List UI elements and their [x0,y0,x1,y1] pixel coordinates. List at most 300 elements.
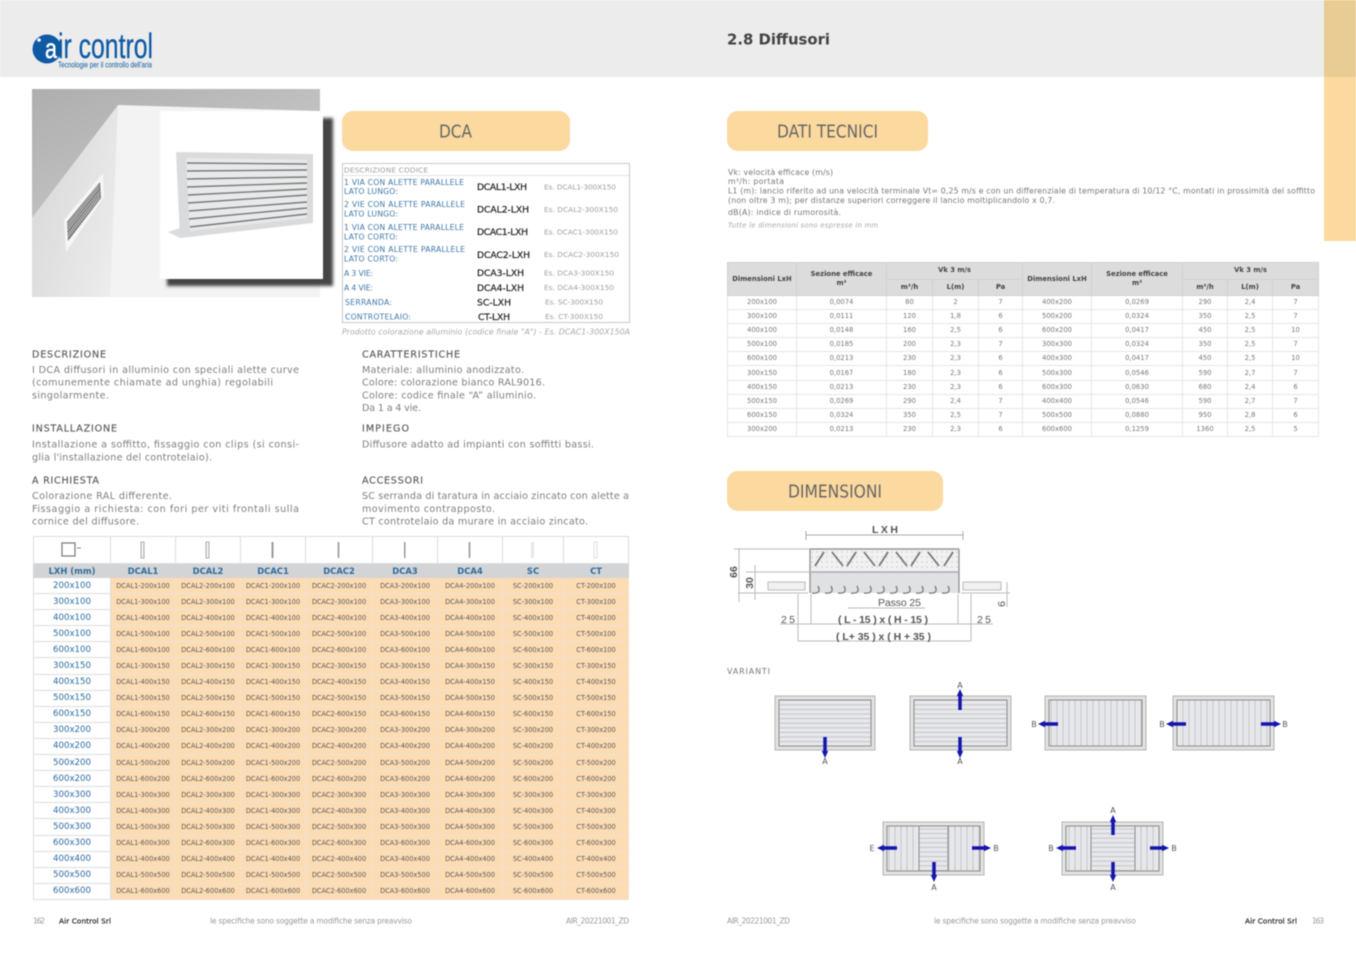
ordering codes table: DCAL1-300x150 [116,662,170,670]
ordering codes table: DCAC2-600x100 [312,646,366,654]
variant 3: one way left: B [1031,720,1037,729]
variant 5: three ways: B [993,844,999,853]
text block: a richiesta: Fissaggio a richiesta: con fori per viti frontali sulla [32,504,299,515]
ordering codes table: 600x100 [53,645,91,655]
technical data table: 80 [905,298,914,306]
ordering codes table: DCAL2-300x300 [181,791,235,799]
technical data table: 500x500 [1042,411,1072,419]
ordering codes table: 300x300 [53,790,91,800]
ordering codes table: DCAC1-600x600 [246,887,300,895]
variant 1: one way down [775,696,875,766]
code description table: DESCRIZIONE CODICE [344,166,428,174]
ordering codes table [32,536,630,900]
technical data table: 7 [998,340,1003,348]
ordering codes table: CT-600x100 [576,646,616,654]
dimension drawing [728,524,1010,643]
product photo [32,89,333,297]
technical data table: 0,0074 [830,298,853,306]
code description table: Es. DCAL1-300X150 [544,182,616,192]
dimension drawing: 25 [977,614,991,626]
code description table: Es. DCAL2-300X150 [544,205,618,214]
ordering codes table: DCAL1-400x300 [116,807,170,815]
technical data table: 300x200 [747,425,777,433]
ordering codes table: SC-300x100 [513,598,553,606]
ordering codes table: CT-500x500 [576,871,616,879]
technical data table: 2,5 [1245,326,1255,334]
technical notes: m³/h: portata [728,177,784,186]
technical data table: 680 [1199,383,1212,391]
ordering codes table: DCA3-300x150 [380,662,430,670]
dimension drawing: 30 [744,577,756,589]
ordering codes table: 300x100 [53,597,91,607]
variant 5: three ways: E [869,844,875,853]
variant 6: four ways: A [1110,806,1116,815]
ordering codes table: DCAL1-600x300 [116,839,170,847]
ordering codes table: DCAC1-400x400 [246,855,300,863]
technical data table: L(m) [947,283,964,291]
pill heading: DCA: DCA [439,122,473,142]
ordering codes table: CT-500x300 [576,823,616,831]
technical data table: m³/h [1196,283,1214,291]
technical data table: 0,0213 [830,383,853,391]
technical data table: 0,1259 [1125,425,1149,433]
ordering codes table: SC [527,566,539,576]
technical data table: 2,5 [950,411,961,419]
ordering codes table: DCAL1-400x150 [116,678,170,686]
footer right: Air Control Srl [1245,916,1297,926]
ordering codes table: DCAL1-400x400 [116,855,170,863]
technical data table: 500x200 [1042,312,1072,320]
technical data table: 2,5 [1245,354,1255,362]
ordering codes table: DCA3 [392,566,418,576]
text block: installazione: Installazione a soffitto, fissaggio con clips (si consi- [32,440,299,450]
ordering codes table: SC-400x150 [513,678,553,686]
ordering codes table: DCAL2-500x500 [181,871,235,879]
ordering codes table: LXH (mm) [49,566,95,576]
text block: a richiesta: cornice del diffusore. [32,516,139,528]
ordering codes table: DCA3-400x400 [380,855,430,863]
technical data table: 7 [1293,298,1298,306]
technical data table: 2,5 [1245,340,1255,348]
technical data table: 2,3 [950,425,961,433]
technical data table: 450 [1199,354,1212,362]
ordering codes table: CT-300x300 [576,791,616,799]
variant 4: two ways horizontal: B [1282,720,1288,729]
technical data table: 6 [998,312,1003,320]
technical data table: 590 [1199,369,1212,377]
technical data table: 0,0417 [1125,354,1149,362]
ordering codes table: DCA3-500x100 [380,630,430,638]
technical notes: Vk: velocità efficace (m/s) [728,168,833,177]
technical data table: 0,0111 [830,312,853,320]
ordering codes table: 200x100 [53,581,91,591]
ordering codes table: DCAL2 [193,566,223,576]
technical notes: (non oltre 3 m); per distanze superiori correggere il lancio moltiplicandolo x 0,7. [728,196,1055,205]
pill heading: dati tecnici: DATI TECNICI [777,122,878,142]
ordering codes table: SC-400x400 [513,855,553,863]
technical data table: 7 [998,298,1003,306]
ordering codes table: DCAL1 [128,566,158,576]
technical data table: 2,3 [950,369,961,377]
ordering codes table: DCAC2-400x200 [312,742,366,750]
ordering codes table: SC-400x100 [513,614,553,622]
technical data table: 7 [998,397,1003,405]
code description table: SC-LXH [477,298,511,308]
technical data table: L(m) [1241,283,1259,291]
technical data table: 290 [903,397,916,405]
technical data table: 7 [1293,312,1298,320]
technical data table: Dimensioni LxH [732,274,792,282]
ordering codes table: DCAC2-400x400 [312,855,366,863]
pill heading: dimensioni [727,471,943,511]
dimension drawing: 25 [781,614,795,626]
code description table: Es. DCA4-300X150 [544,283,614,292]
ordering codes table: DCAC2-500x500 [312,871,366,879]
ordering codes table: DCAL2-300x100 [181,598,235,606]
ordering codes table: DCA3-500x200 [380,759,430,767]
variant 6: four ways: B [1048,844,1054,853]
ordering codes table: DCA4-300x100 [445,598,495,606]
footer right [727,916,1324,926]
code description table [342,164,630,323]
technical data table: 2,7 [1245,397,1255,405]
text block: a richiesta: Colorazione RAL differente. [32,491,172,502]
code description table: DCAL2-LXH [477,204,529,216]
technical data table: 400x300 [1042,354,1072,362]
ordering codes table: DCAL1-200x100 [116,582,170,590]
ordering codes table: DCA4-400x300 [445,807,495,815]
technical notes: Tutte le dimensioni sono espresse in mm [728,222,878,230]
ordering codes table: SC-600x150 [513,710,553,718]
text block: descrizione: singolarmente. [32,390,109,402]
ordering codes table: 500x500 [53,870,91,880]
ordering codes table: DCAC1-400x200 [246,742,300,750]
ordering codes table: DCAC1-500x100 [246,630,300,638]
ordering codes table: DCAC1-500x150 [246,694,300,702]
ordering codes table: DCAC2-500x300 [312,823,366,831]
ordering codes table: CT-500x150 [576,694,616,702]
text block: accessori [362,476,629,528]
ordering codes table: DCA3-500x500 [380,871,430,879]
technical notes: L1 (m): lancio riferito ad una velocità terminale Vt= 0,25 m/s e con un differenziale di temperatura di 10/12 °C, montati in prossimità del soffitto [728,186,1315,196]
ordering codes table: SC-500x200 [513,759,553,767]
ordering codes table: SC-600x300 [513,839,553,847]
ordering codes table: DCAC2-400x100 [312,614,366,622]
ordering codes table: DCAC2-300x200 [312,726,366,734]
text block: accessori: movimento contrapposto. [362,504,495,515]
ordering codes table: DCA4-400x100 [445,614,495,622]
code description table: A 3 VIE: [344,269,373,278]
ordering codes table: DCA3-300x100 [380,598,430,606]
technical data table: 1360 [1196,425,1214,433]
variant 1: one way down: A [822,757,828,766]
ordering codes table: SC-500x100 [513,630,553,638]
ordering codes table: CT-400x200 [576,742,616,750]
ordering codes table: CT-500x100 [576,630,616,638]
pill heading: dati tecnici [727,111,928,151]
ordering codes table: DCA4-500x500 [445,871,495,879]
technical data table: 230 [903,425,916,433]
ordering codes table: DCAC2-300x300 [312,791,366,799]
ordering codes table: DCA4-500x100 [445,630,495,638]
ordering codes table: SC-400x200 [513,742,553,750]
ordering codes table: DCA4-400x400 [445,855,495,863]
ordering codes table: DCAC2-500x200 [312,759,366,767]
ordering codes table: DCAL2-600x100 [181,646,235,654]
ordering codes table: DCAL1-600x200 [116,775,170,783]
technical data table: 600x150 [747,411,777,419]
text block: impiego: Diffusore adatto ad impianti con soffitti bassi. [362,440,594,450]
text block: accessori: SC serranda di taratura in acciaio zincato con alette a [362,491,629,502]
footnote: Prodotto colorazione alluminio (codice finale "A") - Es. DCAC1-300X150A [342,328,630,336]
ordering codes table: DCA3-400x100 [380,614,430,622]
footer right: 163 [1312,916,1324,926]
ordering codes table: 600x150 [53,709,91,719]
ordering codes table: DCA4-500x200 [445,759,495,767]
code description table: DCA3-LXH [477,268,524,279]
ordering codes table: DCAC2-500x150 [312,694,366,702]
page heading: 2.8 Diffusori: 2.8 Diffusori [727,30,830,48]
text block: impiego: IMPIEGO [362,424,409,434]
ordering codes table: DCAL1-500x100 [116,630,170,638]
ordering codes table: DCAL1-300x100 [116,598,170,606]
ordering codes table: DCA4-500x300 [445,823,495,831]
code description table: CONTROTELAIO: [345,312,411,322]
ordering codes table: 500x100 [53,629,91,639]
ordering codes table: DCAC2 [323,566,355,576]
technical data table: 2 [953,298,958,306]
technical data table: 6 [998,425,1003,433]
ordering codes table: DCA4-400x200 [445,742,495,750]
technical data table: 2,5 [1245,425,1255,433]
ordering codes table: DCAL2-400x400 [181,855,235,863]
ordering codes table: DCAL2-600x600 [181,887,235,895]
code description table: DCAC2-LXH [477,250,530,261]
ordering codes table: DCAL1-400x100 [116,614,170,622]
technical data table: m² [836,279,847,287]
dimension drawing: Passo 25 [878,597,921,609]
ordering codes table: CT-400x100 [576,614,616,622]
technical data table: 590 [1199,397,1212,405]
technical data table: 300x100 [747,312,777,320]
text block: accessori: CT controtelaio da murare in acciaio zincato. [362,516,588,528]
text block: caratteristiche: Colore: colorazione bianco RAL9016. [362,378,545,388]
technical data table: 600x100 [747,354,777,362]
dimension drawing: L X H [872,524,898,536]
footer left [33,916,629,926]
technical data table: 500x100 [747,340,777,348]
technical data table: 2,5 [950,326,961,334]
text block: caratteristiche: Materiale: alluminio anodizzato. [362,365,524,376]
footer right: le specifiche sono soggette a modifiche senza preavviso [934,916,1136,926]
ordering codes table: DCAC2-300x150 [312,662,366,670]
ordering codes table: DCAL2-300x200 [181,726,235,734]
ordering codes table: SC-200x100 [513,582,553,590]
ordering codes table: SC-600x200 [513,775,553,783]
technical data table: 0,0269 [830,397,853,405]
variant 2: two ways vertical [910,681,1011,766]
technical data table: 600x200 [1042,326,1072,334]
ordering codes table: DCA4-600x150 [445,710,495,718]
text block: installazione: glia l'installazione del controtelaio). [32,452,212,464]
ordering codes table: DCA4-300x300 [445,791,495,799]
technical data table: 7 [998,411,1003,419]
ordering codes table: DCAL1-500x500 [116,871,170,879]
ordering codes table: SC-600x600 [513,887,553,895]
technical data table: 0,0324 [1125,340,1149,348]
ordering codes table: DCA3-300x200 [380,726,430,734]
technical data table: 6 [1293,411,1298,419]
code description table: A 4 VIE: [344,284,373,292]
technical data table: 0,0324 [830,411,853,419]
ordering codes table: 300x150 [53,661,91,671]
text block: caratteristiche: Colore: codice finale “A” alluminio. [362,390,536,402]
ordering codes table: DCA4-300x150 [445,662,495,670]
technical data table: 0,0630 [1125,383,1149,391]
pill heading: dimensioni: DIMENSIONI [788,482,882,502]
ordering codes table: DCAC2-400x300 [312,807,366,815]
ordering codes table: DCAC2-600x600 [312,887,366,895]
code description table: LATO LUNGO: [344,210,398,218]
text block: accessori: ACCESSORI [362,476,423,486]
ordering codes table: DCA4-500x150 [445,694,495,702]
technical data table: 0,0880 [1125,411,1149,419]
technical data table: 300x300 [1042,340,1072,348]
ordering codes table: DCA4 [457,566,483,576]
header band [0,0,1356,77]
ordering codes table: DCA3-600x150 [380,710,430,718]
ordering codes table: DCAL2-500x300 [181,823,235,831]
ordering codes table: 400x200 [53,741,91,751]
ordering codes table: DCA3-600x200 [380,775,430,783]
technical data table: 350 [903,411,916,419]
technical data table: 5 [1293,425,1298,433]
technical data table: 0,0417 [1125,326,1149,334]
side tab [1324,0,1356,241]
technical data table: 6 [998,326,1003,334]
ordering codes table: SC-500x300 [513,823,553,831]
technical data table: 300x150 [747,369,777,377]
variant 6: four ways: A [1110,883,1116,892]
variant 2: two ways vertical: A [957,757,963,766]
ordering codes table: DCAC1-300x300 [246,791,300,799]
ordering codes table: SC-500x500 [513,871,553,879]
technical data table: 7 [1293,340,1298,348]
technical data table: 200x100 [747,298,777,306]
text block: caratteristiche: Da 1 a 4 vie. [362,403,421,414]
ordering codes table: DCAC2-600x200 [312,775,366,783]
ordering codes table: 400x100 [53,613,91,623]
dimension drawing: 66 [728,566,740,578]
ordering codes table: DCAC1-300x200 [246,726,300,734]
dimension drawing: ( L+ 35 ) x ( H + 35 ) [836,631,931,643]
variant 3: one way left [1031,696,1146,750]
technical data table: 2,4 [1245,383,1255,391]
technical data table: 6 [1293,383,1298,391]
ordering codes table: 500x200 [53,758,91,768]
footer left: le specifiche sono soggette a modifiche senza preavviso [210,916,412,926]
code description table: DCA4-LXH [477,283,524,294]
technical data table: 6 [998,383,1003,391]
ordering codes table: DCAC2-600x150 [312,710,366,718]
technical data table: Dimensioni LxH [1027,274,1087,282]
code description table: Es. DCAC2-300X150 [544,250,619,259]
technical notes: dB(A): indice di rumorosità. [728,208,841,217]
technical notes [728,168,1315,230]
technical data table: Sezione efficace [811,270,872,278]
ordering codes table: CT-300x200 [576,726,616,734]
ordering codes table: DCAC1-400x100 [246,614,300,622]
code description table: 2 VIE CON ALETTE PARALLELE [344,245,465,254]
ordering codes table: DCA3-300x300 [380,791,430,799]
technical data table: Vk 3 m/s [1234,266,1267,274]
ordering codes table: SC-400x300 [513,807,553,815]
ordering codes table: DCAL2-400x100 [181,614,235,622]
variant 4: two ways horizontal: B [1159,720,1165,729]
code description table: Es. DCAC1-300X150 [544,228,618,236]
pill heading: DCA [342,111,570,151]
variant 6: four ways [1048,806,1177,892]
ordering codes table: DCAC2-500x100 [312,630,366,638]
code description table: 1 VIA CON ALETTE PARALLELE [344,223,464,232]
code description table: CT-LXH [478,312,510,323]
technical data table: 2,3 [950,383,961,391]
ordering codes table: DCA3-500x300 [380,823,430,831]
ordering codes table: DCAC1-300x100 [246,598,300,606]
text block: a richiesta: A RICHIESTA [32,476,99,486]
technical data table: 2,3 [950,340,961,348]
technical data table: 10 [1291,354,1300,362]
technical data table: 0,0546 [1125,369,1149,377]
ordering codes table: CT-600x600 [576,887,616,895]
ordering codes table: DCA4-600x100 [445,646,495,654]
ordering codes table: SC-500x150 [513,694,553,702]
ordering codes table: 500x150 [53,693,91,703]
code description table: DCAC1-LXH [477,227,528,238]
ordering codes table: DCA4-600x300 [445,839,495,847]
technical data table [726,262,1320,437]
ordering codes table: DCA3-600x300 [380,839,430,847]
technical data table: m³/h [901,283,918,291]
ordering codes table: CT [590,566,602,576]
variant 2: two ways vertical: A [957,681,963,690]
code description table: SERRANDA: [345,298,392,307]
technical data table: 0,0213 [830,425,853,433]
ordering codes table: CT-400x150 [576,678,616,686]
technical data table: 2,4 [950,397,961,405]
technical data table: 400x400 [1042,397,1072,405]
technical data table: 450 [1199,326,1212,334]
technical data table: 0,0324 [1125,312,1149,320]
ordering codes table: DCAL2-500x150 [181,694,235,702]
ordering codes table: DCAL2-500x100 [181,630,235,638]
ordering codes table: DCA4-600x200 [445,775,495,783]
ordering codes table: DCAC1-500x200 [246,759,300,767]
technical data table: 120 [903,312,916,320]
ordering codes table: SC-300x300 [513,791,553,799]
dimension drawing: ( L - 15 ) x ( H - 15 ) [838,614,928,626]
ordering codes table: DCA3-600x600 [380,887,430,895]
ordering codes table: DCAC2-400x150 [312,678,366,686]
footer left: AIR_20221001_ZD [566,916,629,926]
ordering codes table: DCAC1-400x150 [246,678,300,686]
code description table: LATO LUNGO: [344,187,398,196]
ordering codes table: DCAC1-600x200 [246,775,300,783]
ordering codes table: 600x300 [53,838,91,848]
technical data table: Pa [1291,283,1300,291]
technical data table: 200 [903,340,916,348]
ordering codes table: DCA4-200x100 [445,582,495,590]
